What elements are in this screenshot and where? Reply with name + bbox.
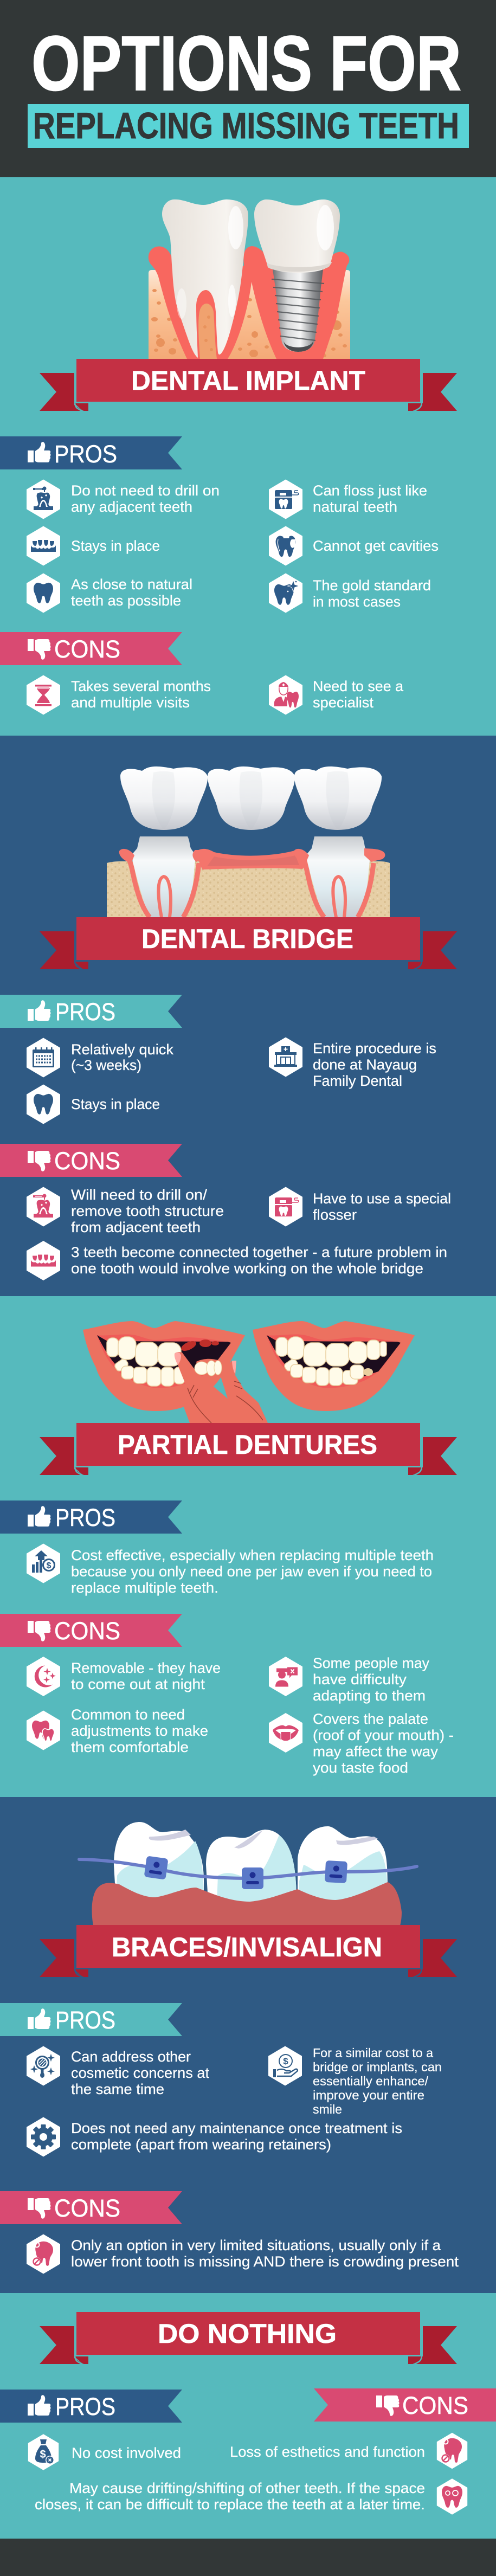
bullet: specialist [269,675,403,714]
cons ribbon: CONS [54,635,120,663]
bullet: connected teeth [27,1241,447,1280]
bullet: removable: to come out at night [71,1676,205,1692]
illustration: dental bridge [107,767,390,917]
bullet: specialist: Need to see a [313,678,403,694]
bullet: stays in place [27,1085,160,1124]
banner: dental bridge: DENTAL BRIDGE [141,924,353,954]
panel: dental implant [0,177,496,736]
bullet: limited situations: lower front tooth is missing AND there is crowding present [71,2253,459,2270]
bullet: natural [27,574,192,613]
bullet: drilling adjacent teeth: from adjacent teeth [71,1219,201,1235]
bullet: floss: natural teeth [313,499,397,515]
bullet: connected teeth: one tooth would involve working on the whole bridge [71,1260,423,1277]
bullet: relatively quick: Relatively quick [71,1041,174,1058]
bullet: stays in place [27,526,160,565]
footer band [0,2539,496,2576]
cons ribbon: CONS [54,1617,120,1645]
bullet: cost effective [27,1544,434,1596]
pros ribbon [0,1500,182,1534]
bullet: cost effective: $ [47,1561,51,1570]
bullet: palate: (roof of your mouth) - [313,1727,454,1743]
bullet: no drilling: any adjacent teeth [71,499,192,515]
bullet: gold standard: in most cases [313,594,401,610]
banner: braces and invisalign [40,1925,457,1978]
pros ribbon [0,2390,182,2423]
bullet: drilling adjacent teeth: Will need to drill on/ [71,1187,208,1203]
banner: do nothing: DO NOTHING [158,2319,337,2349]
illustration: braces on teeth [79,1822,417,1925]
header band [0,0,496,177]
bullet: cost effective: Cost effective, especially when replacing multiple teeth [71,1547,434,1563]
bullet: adjustments: adjustments to make [71,1723,208,1739]
bullet: no drilling: Do not need to drill on [71,482,220,499]
bullet: cost effective: because you only need one per jaw even if you need to [71,1563,432,1580]
bullet: similar cost: improve your entire [313,2088,424,2102]
bullet: cosmetic concerns [27,2046,210,2097]
cons ribbon [314,2388,496,2422]
bullet: stays in place: Stays in place [71,538,160,554]
panel: dental bridge [0,736,496,1296]
bullet: no cost: No cost involved [72,2445,181,2461]
bullet: loss of esthetics: Loss of esthetics and function [230,2444,425,2460]
bullet: removable: Removable - they have [71,1660,221,1676]
bullet: no maintenance [27,2117,402,2156]
cons ribbon [0,632,182,665]
bullet: adapting difficulty: have difficulty [313,1671,407,1688]
bullet: drilling adjacent teeth [27,1187,224,1235]
cons ribbon [0,2191,182,2224]
bullet: similar cost: For a similar cost to a [313,2046,433,2060]
bullet: palate: Covers the palate [313,1711,428,1727]
bullet: relatively quick [27,1038,174,1077]
bullet: gold standard [269,574,431,613]
bullet: relatively quick: (~3 weeks) [71,1057,141,1073]
illustration: mouths with denture [83,1321,415,1423]
bullet: drifting teeth [35,2479,467,2514]
bullet: cosmetic concerns: the same time [71,2081,164,2097]
bullet: floss: Can floss just like [313,482,427,499]
banner: dental bridge [40,917,457,970]
banner: dental implant: DENTAL IMPLANT [131,365,365,396]
bullet: entire procedure: Entire procedure is [313,1040,436,1057]
bullet: several months [27,675,211,714]
bullet: adjustments [27,1706,208,1755]
bullet: no cost [28,2435,181,2470]
bullet: drifting teeth: May cause drifting/shifting of other teeth. If the space [69,2480,425,2496]
bullet: adapting difficulty [269,1655,430,1704]
bullet: specialist: specialist [313,694,374,711]
bullet: special flosser: flosser [313,1207,357,1223]
panel: do nothing [0,2293,496,2539]
bullet: several months: and multiple visits [71,694,190,711]
banner: partial dentures: PARTIAL DENTURES [118,1429,377,1460]
bullet: no drilling [27,480,220,519]
bullet: natural: teeth as possible [71,593,181,609]
bullet: cosmetic concerns: Can address other [71,2049,191,2065]
panel: partial dentures [0,1296,496,1797]
bullet: palate [269,1711,454,1776]
bullet: limited situations: Only an option in very limited situations, usually only if a [71,2237,441,2253]
bullet: palate: you taste food [313,1760,408,1776]
bullet: cosmetic concerns: cosmetic concerns at [71,2065,210,2081]
bullet: adjustments: Common to need [71,1706,185,1723]
bullet: similar cost: essentially enhance/ [313,2074,429,2088]
bullet: no cavities: Cannot get cavities [313,538,439,554]
bullet: special flosser: Have to use a special [313,1190,451,1207]
bullet: similar cost: smile [313,2102,342,2116]
bullet: natural: As close to natural [71,576,192,593]
bullet: entire procedure [269,1038,436,1089]
bullet: similar cost [269,2046,442,2116]
bullet: drilling adjacent teeth: remove tooth structure [71,1203,224,1219]
banner: dental implant [40,359,457,411]
bullet: special flosser [269,1187,451,1226]
bullet: no maintenance: Does not need any maintenance once treatment is [71,2120,402,2136]
bullet: limited situations [27,2234,459,2274]
bullet: entire procedure: Family Dental [313,1073,402,1089]
bullet: floss [269,480,427,519]
pros ribbon: PROS [54,440,117,468]
bullet: no maintenance: complete (apart from wearing retainers) [71,2136,331,2153]
pros ribbon: PROS [55,2006,115,2034]
pros ribbon: PROS [55,1504,115,1531]
panel: braces and invisalign [0,1797,496,2293]
pros ribbon [0,2003,182,2036]
cons ribbon: CONS [54,2194,120,2222]
bullet: several months: Takes several months [71,678,211,694]
bullet: no cavities [269,526,439,565]
bullet: removable [27,1657,221,1696]
bullet: cost effective: replace multiple teeth. [71,1580,218,1596]
bullet: no cost: $ [40,2449,46,2461]
pros ribbon [0,995,182,1028]
pros ribbon [0,436,182,469]
banner: braces and invisalign: BRACES/INVISALIGN [112,1932,382,1962]
pros ribbon: PROS [55,998,115,1026]
bullet: gold standard: The gold standard [313,577,431,594]
bullet: similar cost: bridge or implants, can [313,2060,442,2074]
bullet: stays in place: Stays in place [71,1096,160,1112]
bullet: connected teeth: 3 teeth become connected together - a future problem in [71,1244,447,1260]
cons ribbon [0,1144,182,1177]
cons ribbon: CONS [54,1147,120,1175]
bullet: palate: may affect the way [313,1743,439,1760]
pros ribbon: PROS [55,2393,115,2420]
bullet: entire procedure: done at Nayaug [313,1057,417,1073]
bullet: adapting difficulty: adapting to them [313,1688,426,1704]
banner: partial dentures [40,1423,457,1476]
bullet: drifting teeth: closes, it can be difficult to replace the teeth at a later time. [35,2496,425,2513]
cons ribbon: CONS [402,2392,468,2419]
bullet: loss of esthetics [230,2433,467,2469]
cons ribbon [0,1614,182,1647]
banner: do nothing [40,2312,457,2365]
bullet: adapting difficulty: Some people may [313,1655,430,1671]
bullet: adjustments: them comfortable [71,1739,189,1755]
illustration: tooth and implant [149,199,350,359]
bullet: similar cost: $ [283,2056,288,2066]
